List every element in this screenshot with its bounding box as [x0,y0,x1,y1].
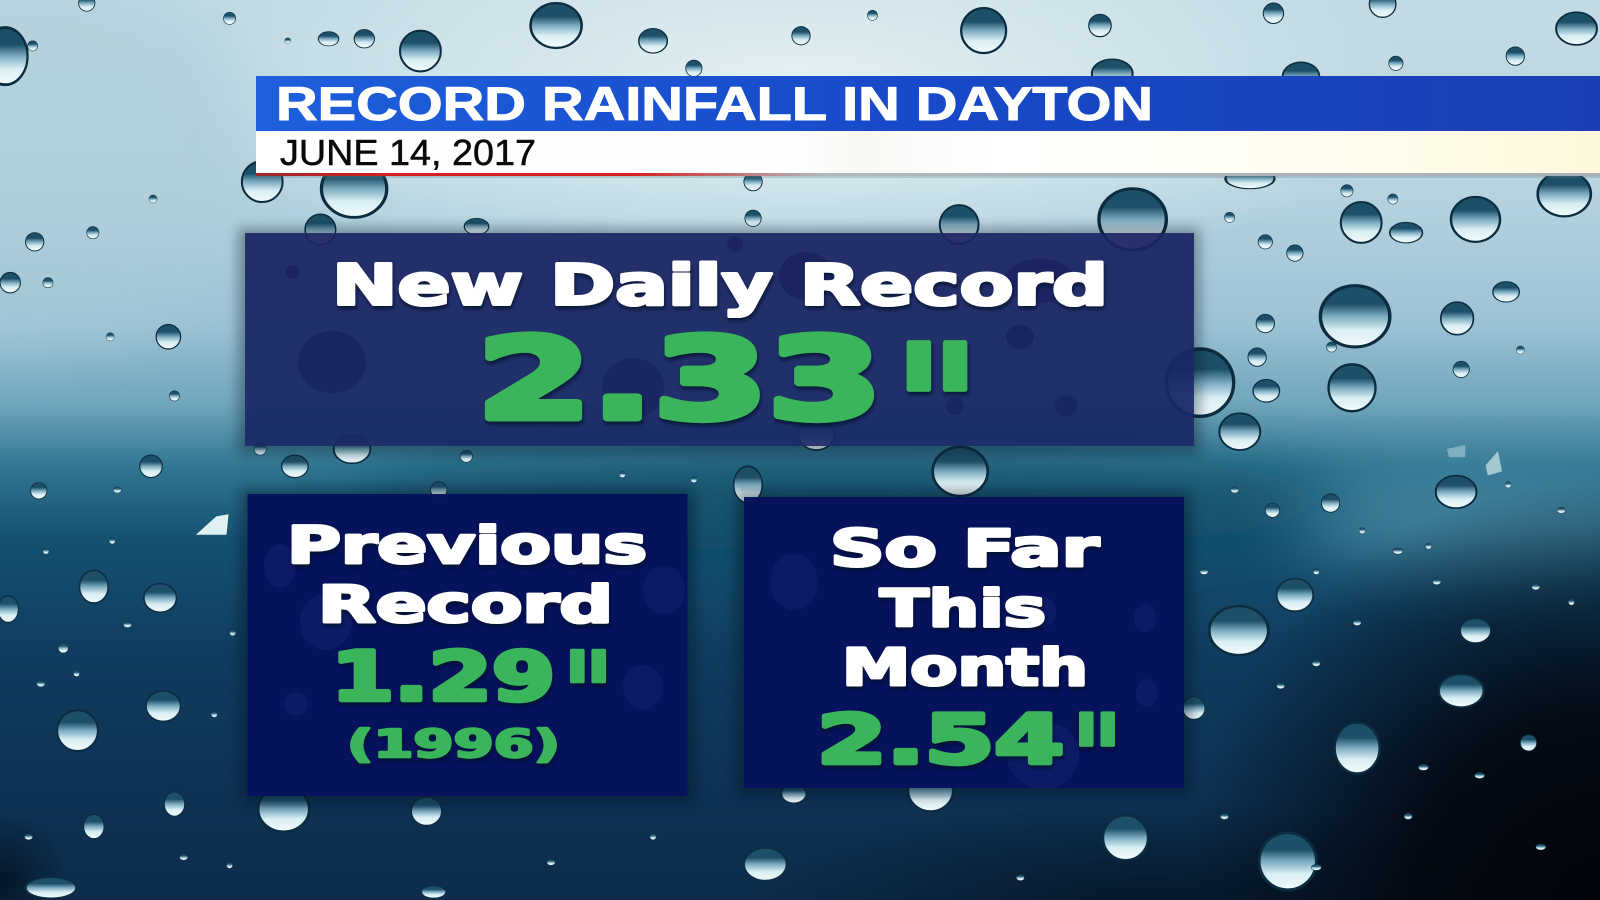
droplets seen through panel [286,236,1077,418]
droplets seen through panel [264,544,685,716]
header banner [256,76,1600,178]
heading: so far this month: So Far [830,520,1099,579]
heading: previous record: Previous [287,517,647,576]
value: 2.54 inches: 2.54 [817,701,1064,780]
value: 1.29 inches [331,628,614,761]
value: 2.33 inches: " [893,308,981,509]
year: 1996: (1996) [347,722,560,766]
heading: previous record: Record [318,576,613,635]
heading: so far this month: Month [842,639,1088,698]
heading: previous record [287,517,647,635]
panel: new daily record [238,228,1200,509]
droplets seen through panel [770,554,1158,789]
value: 1.29 inches: 1.29 [331,638,555,717]
value: 2.33 inches: 2.33 [477,315,882,445]
value: 2.54 inches [817,689,1123,827]
date bar: JUNE 14, 2017 [280,132,536,173]
heading: so far this month: This [880,580,1046,639]
panel: previous record [241,489,694,803]
value: 2.54 inches: " [1071,689,1123,827]
heading: so far this month [830,520,1099,698]
value: 2.33 inches [477,308,981,509]
heading: new daily record: New Daily Record [332,254,1108,318]
headline bar: RECORD RAINFALL IN DAYTON [276,77,1153,130]
date bar [256,131,1600,176]
panel: so far this month [737,491,1191,827]
value: 1.29 inches: " [562,628,614,761]
headline bar [256,76,1600,131]
